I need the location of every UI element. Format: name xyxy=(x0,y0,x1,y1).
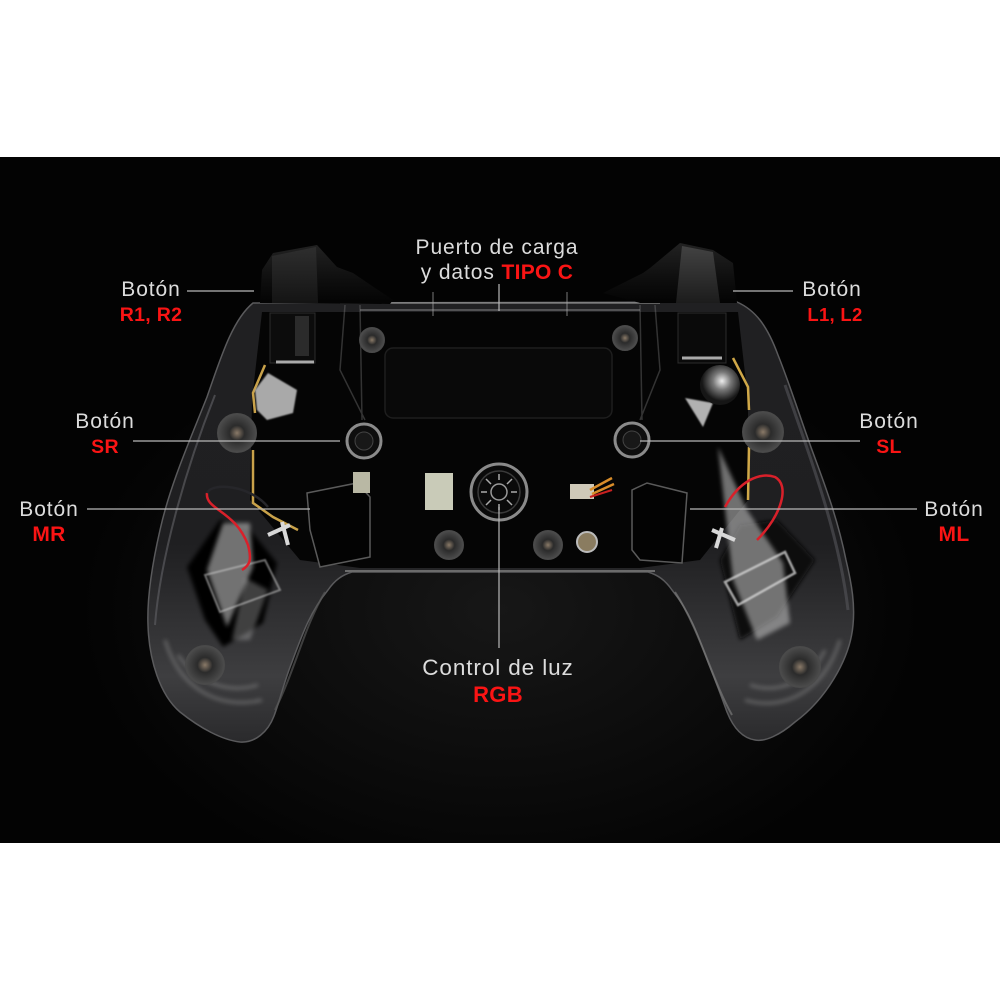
center panel xyxy=(385,348,612,418)
controller xyxy=(148,243,854,742)
label: charging port: y datos TIPO C xyxy=(421,261,573,284)
label: RGB light control xyxy=(422,655,574,707)
right grip clear clip xyxy=(725,552,795,605)
label: charging port xyxy=(416,236,578,284)
left top pillar xyxy=(340,305,365,420)
label: SL xyxy=(859,410,919,458)
top transparent bar xyxy=(340,292,660,316)
label: ML: ML xyxy=(939,523,969,546)
left silver part xyxy=(255,373,297,420)
right rim glare xyxy=(785,385,848,610)
right grip black core xyxy=(720,520,815,640)
RGB light control knob xyxy=(471,464,527,520)
label: ML: Botón xyxy=(924,498,984,521)
left black module xyxy=(307,483,370,567)
right top pillar xyxy=(640,305,660,420)
center black interior xyxy=(250,312,748,568)
white clip left xyxy=(268,522,290,545)
label: charging port: Puerto de carga xyxy=(416,236,578,259)
left trigger mechanism xyxy=(270,313,315,363)
left grip bottom ridges xyxy=(165,640,262,702)
connector xyxy=(570,478,614,499)
label: MR xyxy=(19,498,79,546)
black wire left xyxy=(207,487,268,507)
right trigger white reflection xyxy=(685,398,713,427)
center bottom edge xyxy=(345,570,655,572)
right grip glare xyxy=(718,447,790,640)
screws xyxy=(186,326,820,687)
gold trim right xyxy=(733,358,749,500)
label: R1 R2: Botón xyxy=(121,278,181,301)
label: L1 L2 xyxy=(802,278,863,325)
label: MR: MR xyxy=(32,523,66,546)
red wire left xyxy=(207,493,250,570)
label: RGB light control: Control de luz xyxy=(422,655,574,680)
lower edge highlight right xyxy=(675,592,732,715)
right black module xyxy=(632,483,687,563)
label: SR: SR xyxy=(91,436,119,458)
right SL button xyxy=(615,423,649,457)
white clip right xyxy=(712,528,735,548)
small left chip xyxy=(353,472,370,493)
label: SL: Botón xyxy=(859,410,919,433)
right trigger L1 L2 xyxy=(603,243,737,303)
label: ML xyxy=(924,498,984,546)
label: R1 R2 xyxy=(120,278,182,326)
left trigger R1 R2 xyxy=(260,245,393,304)
gold trim left xyxy=(253,365,298,530)
right metal ball xyxy=(700,365,740,405)
label: MR: Botón xyxy=(19,498,79,521)
right trigger mechanism xyxy=(678,313,726,363)
callout lines xyxy=(87,284,917,648)
white chip xyxy=(425,473,453,510)
label: SR: Botón xyxy=(75,410,135,433)
left grip glare xyxy=(207,523,253,627)
left grip black core xyxy=(187,520,277,647)
label: SL: SL xyxy=(876,436,902,458)
controller transparent shell xyxy=(148,302,854,742)
left grip lower glare xyxy=(232,578,268,640)
label: L1 L2: L1, L2 xyxy=(807,304,863,325)
label: R1 R2: R1, R2 xyxy=(120,304,182,326)
label: SR xyxy=(75,410,135,458)
left rim glare xyxy=(155,395,215,625)
background panel xyxy=(0,157,1000,843)
label: RGB light control: RGB xyxy=(473,682,523,707)
gold screw xyxy=(577,532,597,552)
right grip bottom ridges xyxy=(745,640,840,703)
left SR button xyxy=(347,424,381,458)
label: L1 L2: Botón xyxy=(802,278,862,301)
left grip clear clip xyxy=(205,560,280,612)
lower edge highlight left xyxy=(275,592,325,710)
red wire right xyxy=(725,476,783,540)
